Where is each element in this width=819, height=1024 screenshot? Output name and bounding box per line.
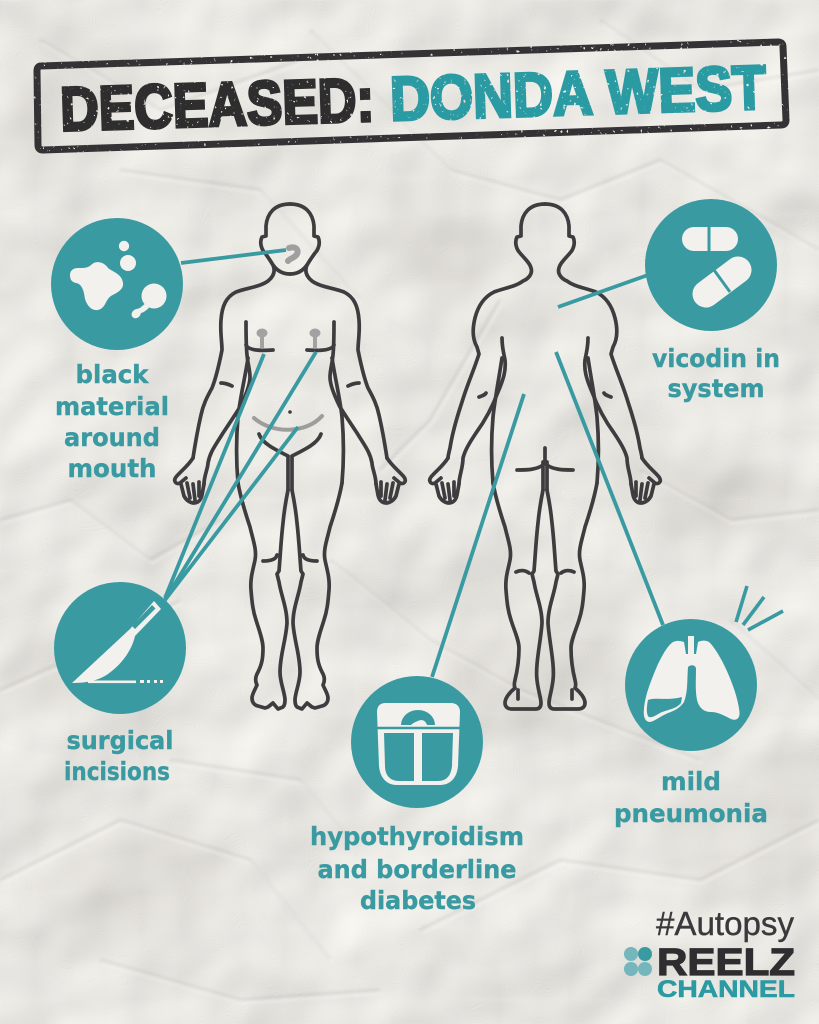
title stamp: Deceased: Donda West (37, 42, 786, 150)
logo: Reelz Channel: REELZ (657, 942, 795, 984)
label: hypothyroidism and borderline diabetes: and borderline (318, 855, 516, 884)
hashtag: #Autopsy (656, 905, 794, 942)
icon: scalpel (54, 582, 186, 714)
pointer: hypothyroidism (432, 394, 524, 677)
front body: left half (175, 204, 290, 709)
label: mild pneumonia: pneumonia (614, 799, 768, 828)
label: black material around mouth: mouth (68, 454, 156, 483)
label: hypothyroidism and borderline diabetes: hypothyroidism (310, 822, 524, 851)
stamp text: DECEASED: (59, 66, 375, 145)
back body figure (430, 204, 660, 709)
pointer: mouth (181, 250, 286, 263)
label: black material around mouth: black (76, 360, 150, 389)
stamp text: DONDA WEST (389, 54, 767, 134)
label: hypothyroidism and borderline diabetes (310, 822, 524, 915)
icon: weighing scale (351, 676, 483, 808)
label: mild pneumonia (614, 767, 768, 828)
crotch line (543, 448, 547, 490)
logo: Reelz Channel (624, 942, 795, 1003)
logo dots (624, 947, 652, 976)
pointer: incision 1 (165, 354, 264, 598)
back body: left half (430, 204, 545, 709)
grey mark: mouth (288, 247, 298, 261)
front body: right half (290, 204, 405, 709)
navel (288, 410, 292, 414)
label: surgical incisions: surgical (66, 726, 174, 755)
icon: black material (51, 218, 183, 350)
pointer: pneumonia (556, 352, 663, 625)
label: vicodin in system: system (668, 374, 764, 403)
pointer: incision 3 (165, 427, 298, 600)
icon: lungs (625, 619, 757, 751)
label: vicodin in system (652, 344, 780, 403)
back body: right half (545, 204, 660, 709)
pneumonia spark lines (736, 586, 783, 630)
label: mild pneumonia: mild (661, 767, 721, 796)
label: surgical incisions: incisions (64, 757, 170, 786)
stamp border (37, 42, 786, 150)
label: black material around mouth: material (55, 392, 169, 421)
icon: vicodin pills (645, 199, 777, 331)
label: hypothyroidism and borderline diabetes: diabetes (360, 886, 476, 915)
stamp text (59, 54, 767, 145)
pointer: incision 2 (165, 352, 316, 600)
label: vicodin in system: vicodin in (652, 344, 780, 373)
logo: Reelz Channel: CHANNEL (657, 976, 795, 1003)
crotch line (288, 457, 292, 490)
front body figure (175, 204, 405, 709)
label: surgical incisions (64, 726, 174, 786)
grey dots (256, 328, 320, 338)
grey mark: breast incisions (254, 333, 322, 430)
label: black material around mouth: around (64, 423, 160, 452)
label: black material around mouth (55, 360, 169, 483)
pointer: vicodin (558, 275, 648, 307)
